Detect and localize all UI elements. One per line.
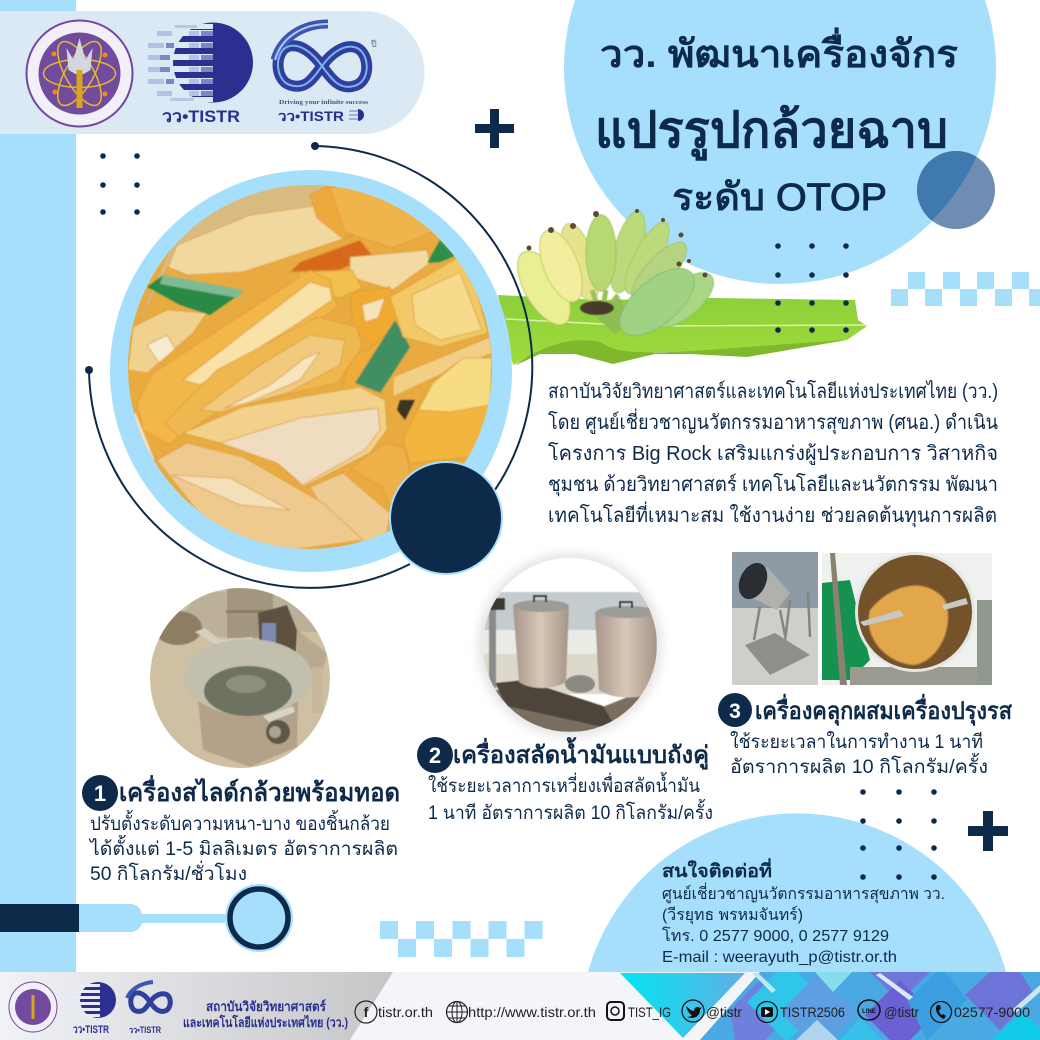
banana tips (526, 209, 708, 278)
instagram (607, 1002, 671, 1020)
facebook: tistr.or.th (378, 1004, 433, 1020)
description 3: อัตราการผลิต 10 กิโลกรัม/ครั้ง (730, 753, 988, 778)
contact block: โทร. 0 2577 9000, 0 2577 9129 (662, 926, 889, 945)
logo: ministry seal (26, 20, 132, 126)
description 2: ใช้ระยะเวลาการเหวี่ยงเพื่อสลัดน้ำมัน (428, 772, 700, 797)
title: วว. พัฒนาเครื่องจักร (600, 27, 959, 76)
navy circle accent (390, 462, 502, 574)
logo: TISTR: วว•TISTR (162, 107, 240, 126)
line (858, 1000, 919, 1020)
header logo pill (0, 11, 424, 134)
facebook: f (364, 1004, 369, 1020)
description 1 (88, 810, 398, 885)
footer TISTR logo (67, 982, 116, 1036)
banana and leaf image (498, 208, 867, 366)
website (446, 1002, 596, 1023)
footer diamond pattern (620, 972, 1040, 1040)
machine 3 photo: tumbler stand (732, 552, 818, 685)
decorative dots lower right (860, 789, 937, 880)
plus icon top (475, 109, 514, 148)
checker pattern right (891, 272, 1040, 306)
left blue strip (0, 0, 76, 972)
decorative dots top-left (100, 153, 140, 215)
contact block (662, 858, 945, 966)
bottom-right contact blob (588, 813, 1006, 972)
footer social links (355, 1000, 1030, 1023)
contact block: สนใจติดต่อที่ (662, 858, 772, 881)
thin arc ring (85, 142, 532, 588)
footer TISTR logo: วว•TISTR (73, 1024, 109, 1036)
logo: 60th anniversary: ปี (371, 39, 377, 49)
description 2: 1 นาที อัตราการผลิต 10 กิโลกรัม/ครั้ง (428, 799, 713, 824)
website: http://www.tistr.or.th (468, 1004, 596, 1020)
bananas (507, 208, 722, 348)
intro paragraph (548, 380, 998, 528)
contact block: E-mail : weerayuth_p@tistr.or.th (662, 949, 897, 966)
hero photo: banana chips (128, 180, 492, 552)
machine 3 photo: drum with chips (822, 552, 992, 685)
description 3: ใช้ระยะเวลาในการทำงาน 1 นาที (730, 731, 983, 753)
decorative dots top-right (775, 243, 849, 333)
line: @tistr (884, 1004, 919, 1020)
title (595, 27, 959, 219)
instagram: TIST_IG (628, 1004, 671, 1020)
step 2 (417, 736, 713, 824)
phone (930, 1002, 1030, 1022)
machine 2 photo: twin spin tanks (483, 558, 658, 732)
footer band (0, 972, 1040, 1040)
plus icon lower right (968, 811, 1008, 851)
intro paragraph: ชุมชน ด้วยวิทยาศาสตร์ เทคโนโลยีและนวัตกรรม พัฒนา (548, 473, 998, 497)
spoon shape accent (0, 884, 293, 952)
description 3 (730, 731, 988, 778)
contact block: (วีรยุทธ พรหมจันทร์) (662, 905, 803, 925)
footer 60th logo: วว•TISTR (129, 1025, 161, 1035)
facebook (355, 1001, 433, 1023)
badge 3 (718, 693, 752, 727)
machine 1 photo: slicer and fryer (150, 588, 330, 768)
top-right title blob (564, 0, 996, 284)
intro paragraph: โดย ศูนย์เชี่ยวชาญนวัตกรรมอาหารสุขภาพ (ศนอ.) ดำเนิน (548, 408, 998, 435)
heading 1: เครื่องสไลด์กล้วยพร้อมทอด (119, 775, 400, 807)
banana leaf (498, 295, 867, 366)
footer 60th logo (127, 982, 170, 1035)
footer seal (9, 982, 57, 1032)
logo: 60th anniversary: Driving your infinite success (279, 99, 369, 106)
footer organisation name (183, 999, 348, 1030)
badge 1 (82, 775, 118, 811)
description 2 (428, 772, 713, 824)
description 1: 50 กิโลกรัม/ชั่วโมง (90, 860, 247, 885)
line: LINE (862, 1009, 876, 1015)
badge 3: 3 (729, 700, 741, 723)
logo: TISTR (147, 22, 253, 126)
title: แปรรูปกล้วยฉาบ (595, 102, 948, 161)
badge 1: 1 (94, 781, 106, 806)
machine 2 photo glow (478, 553, 662, 737)
badge 2 (417, 737, 453, 773)
heading 2: เครื่องสลัดน้ำมันแบบถังคู่ (453, 736, 709, 770)
hero circle ring (110, 170, 512, 572)
translucent circle accent (917, 151, 995, 229)
badge 2: 2 (429, 743, 441, 768)
contact block: ศูนย์เชี่ยวชาญนวัตกรรมอาหารสุขภาพ วว. (662, 882, 945, 904)
intro paragraph: โครงการ Big Rock เสริมแกร่งผู้ประกอบการ วิสาหกิจ (548, 442, 998, 466)
description 1: ได้ตั้งแต่ 1-5 มิลลิเมตร อัตราการผลิต (88, 835, 398, 860)
twitter: @tistr (706, 1004, 742, 1020)
youtube (756, 1002, 845, 1022)
phone: 02577-9000 (954, 1004, 1030, 1020)
logo: 60th anniversary (275, 24, 377, 124)
step 3 (718, 693, 1012, 778)
title: ระดับ OTOP (672, 177, 887, 219)
description 1: ปรับตั้งระดับความหนา-บาง ของชิ้นกล้วย (90, 810, 390, 835)
heading 3: เครื่องคลุกผสมเครื่องปรุงรส (755, 693, 1012, 727)
footer organisation name: สถาบันวิจัยวิทยาศาสตร์ (206, 999, 326, 1014)
footer organisation name: และเทคโนโลยีแห่งประเทศไทย (วว.) (183, 1014, 348, 1030)
logo: 60th anniversary: วว•TISTR (278, 108, 344, 124)
youtube: TISTR2506 (780, 1004, 845, 1020)
intro paragraph: เทคโนโลยีที่เหมาะสม ใช้งานง่าย ช่วยลดต้นทุนการผลิต (548, 501, 997, 528)
step 1 (82, 775, 400, 885)
checker pattern bottom (380, 921, 542, 957)
twitter (682, 1000, 742, 1022)
